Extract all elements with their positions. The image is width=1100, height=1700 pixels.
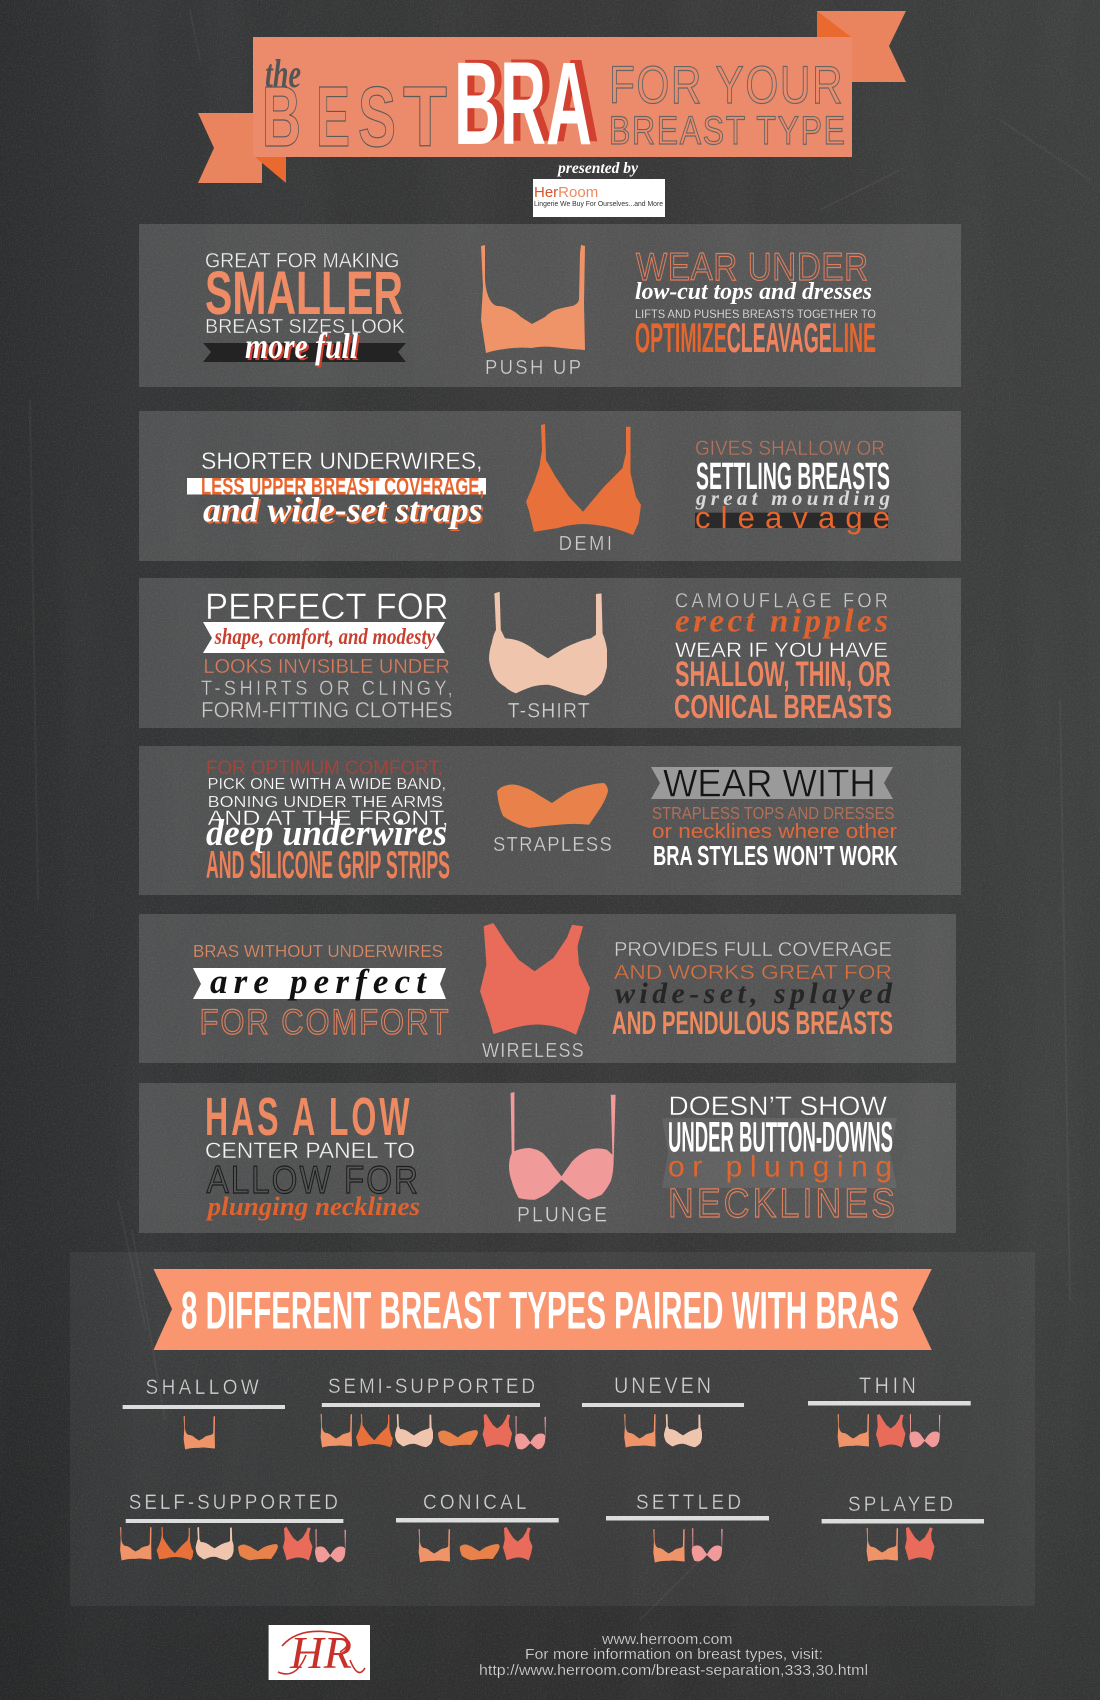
title word: best	[262, 70, 447, 165]
title: breast type: BREAST TYPE	[609, 108, 845, 153]
type: semi-supported	[321, 1375, 546, 1449]
text: and wide-set straps: and wide-set straps	[205, 492, 484, 532]
text: and pendulous breasts: AND PENDULOUS BREASTS	[612, 1005, 893, 1041]
banner left fold	[255, 157, 286, 183]
icon: push up bra	[481, 245, 585, 353]
logo tagline: Lingerie We Buy For Ourselves...and More	[534, 199, 663, 208]
type: splayed: SPLAYED	[848, 1493, 953, 1516]
text: erect nipples: erect nipples	[675, 604, 888, 640]
type: semi-supported: SEMI-SUPPORTED	[328, 1375, 535, 1398]
icon: wireless bra	[480, 923, 590, 1035]
HR logo	[269, 1625, 370, 1680]
text: looks invisible under: LOOKS INVISIBLE UNDER	[203, 655, 450, 678]
ribbon backdrop	[662, 1118, 897, 1188]
panel: t-shirt	[139, 578, 961, 728]
text: and at the front: AND AT THE FRONT,	[208, 807, 449, 830]
text: bra styles won't work: BRA STYLES WON’T WORK	[653, 840, 898, 871]
label: demi: DEMI	[559, 532, 612, 555]
title word: best: B	[262, 70, 301, 165]
title word: best: T	[403, 70, 447, 165]
text: optimize cleavage line: OPTIMIZECLEAVAGELINE	[635, 314, 876, 361]
text: and wide-set straps: and wide-set straps	[203, 491, 482, 530]
text: for comfort: FOR COMFORT	[200, 1002, 449, 1041]
footer text	[479, 1632, 868, 1679]
banner right tail	[817, 11, 906, 82]
text: perfect for: PERFECT FOR	[205, 586, 449, 627]
ribbon: shape, comfort, and modesty	[203, 622, 445, 653]
text: for optimum comfort: FOR OPTIMUM COMFORT,	[206, 758, 443, 779]
text: lifts and pushes: LIFTS AND PUSHES BREASTS TOGETHER TO	[635, 307, 876, 321]
banner main	[253, 37, 852, 157]
panel: push up	[139, 224, 961, 387]
footer: url: http://www.herroom.com/breast-separation,333,30.html	[479, 1663, 868, 1679]
type: self-supported: SELF-SUPPORTED	[129, 1491, 338, 1514]
text: or plunging: or plunging	[668, 1151, 892, 1184]
presented by: presented by	[556, 160, 639, 177]
icon: plunge bra	[509, 1092, 616, 1200]
text: shallow, thin, or: SHALLOW, THIN, OR	[675, 655, 891, 694]
type: thin: THIN	[859, 1374, 916, 1398]
type: conical: CONICAL	[423, 1491, 527, 1514]
text: wide-set, splayed: wide-set, splayed	[615, 977, 893, 1010]
label: push up: PUSH UP	[485, 356, 581, 379]
text: form-fitting clothes: FORM-FITTING CLOTHES	[201, 698, 452, 723]
ribbon: shape, comfort, and modesty: shape, comfort, and modesty	[214, 624, 436, 649]
type: self-supported	[120, 1491, 346, 1562]
title word: best: S	[358, 70, 396, 165]
text: wear under: WEAR UNDER	[636, 244, 868, 289]
text: pick one with a wide band: PICK ONE WITH A WIDE BAND,	[208, 776, 446, 793]
text: necklines: NECKLINES	[668, 1181, 895, 1227]
ribbon: more full	[203, 326, 406, 368]
title word: bra shadow: BRA	[461, 35, 599, 167]
banner left tail	[198, 113, 262, 183]
type: splayed	[822, 1493, 984, 1561]
text: and works great for: AND WORKS GREAT FOR	[614, 961, 892, 984]
ribbon: more full: more full	[245, 326, 358, 366]
type: settled	[606, 1491, 769, 1562]
title banner	[198, 11, 906, 183]
panel: wireless	[139, 914, 956, 1063]
bar: cleavage: cleavage	[695, 500, 890, 535]
ribbon: wear with: WEAR WITH	[663, 763, 876, 806]
icon: demi bra	[526, 424, 641, 535]
bar: less upper breast coverage	[187, 474, 486, 500]
panel: 8 breast types	[70, 1252, 1035, 1606]
text: smaller: SMALLER	[205, 259, 403, 327]
footer: website: www.herroom.com	[601, 1632, 732, 1648]
type: thin	[808, 1374, 971, 1448]
text: plunging necklines: plunging necklines	[206, 1192, 420, 1221]
title: for your: FOR YOUR	[609, 57, 843, 115]
HR logo: HR	[289, 1627, 352, 1678]
type: uneven: UNEVEN	[614, 1374, 711, 1398]
bar: less upper breast coverage: LESS UPPER BREAST COVERAGE,	[201, 474, 484, 500]
panel: strapless: AND SILICONE GRIP STRIPS	[206, 844, 450, 887]
text: strapless tops and dresses: STRAPLESS TOPS AND DRESSES	[652, 803, 894, 823]
text: doesn't show: DOESN’T SHOW	[668, 1091, 887, 1121]
heading banner	[154, 1269, 932, 1350]
title word: best: E	[316, 70, 350, 165]
ribbon: more full: more full	[247, 328, 360, 368]
label: wireless: WIRELESS	[482, 1040, 584, 1062]
type: shallow: SHALLOW	[146, 1376, 259, 1399]
text: allow for: ALLOW FOR	[207, 1157, 418, 1202]
type: conical	[396, 1491, 559, 1562]
text: low-cut tops and dresses: low-cut tops and dresses	[635, 279, 872, 305]
title word: the: the	[265, 51, 301, 96]
icon: t-shirt bra	[489, 592, 607, 696]
type: uneven	[582, 1374, 744, 1447]
text: or necklines where other: or necklines where other	[652, 821, 897, 843]
title word: bra: BRA	[454, 38, 592, 170]
text: t-shirts or clingy: T-SHIRTS OR CLINGY,	[201, 677, 453, 700]
text: settling breasts: SETTLING BREASTS	[696, 456, 890, 498]
text: bras without underwires: BRAS WITHOUT UNDERWIRES	[193, 941, 443, 961]
panel: strapless	[139, 746, 961, 895]
type: settled: SETTLED	[636, 1491, 741, 1514]
text: great mounding: great mounding	[695, 486, 890, 510]
text: conical breasts: CONICAL BREASTS	[674, 689, 892, 726]
type: shallow	[123, 1376, 285, 1449]
text: boning under the arms: BONING UNDER THE ARMS	[208, 794, 443, 811]
text: has a low: HAS A LOW	[205, 1088, 410, 1147]
panel: demi	[139, 411, 961, 561]
text: shorter underwires: SHORTER UNDERWIRES,	[201, 448, 482, 475]
label: t-shirt: T-SHIRT	[508, 699, 590, 723]
label: strapless: STRAPLESS	[493, 833, 612, 856]
logo wordmark: HerRoom	[534, 184, 598, 201]
icon: strapless bra	[497, 783, 608, 828]
banner right fold	[817, 11, 851, 37]
text: gives shallow or: GIVES SHALLOW OR	[695, 436, 885, 460]
ribbon: are perfect: are perfect	[210, 962, 427, 1001]
text: breast sizes look: BREAST SIZES LOOK	[205, 315, 405, 338]
footer: more information: For more information on breast types, visit:	[525, 1647, 823, 1663]
text: wear if you have: WEAR IF YOU HAVE	[675, 638, 888, 662]
text: deep underwires: deep underwires	[206, 813, 447, 854]
panel: plunge	[139, 1083, 956, 1233]
label: plunge: PLUNGE	[517, 1203, 607, 1227]
text: provides full coverage: PROVIDES FULL COVERAGE	[614, 938, 892, 961]
text: camouflage for: CAMOUFLAGE FOR	[675, 589, 888, 613]
text: center panel to: CENTER PANEL TO	[205, 1138, 415, 1163]
text: great for making: GREAT FOR MAKING	[205, 249, 400, 272]
HerRoom logo	[533, 179, 665, 217]
